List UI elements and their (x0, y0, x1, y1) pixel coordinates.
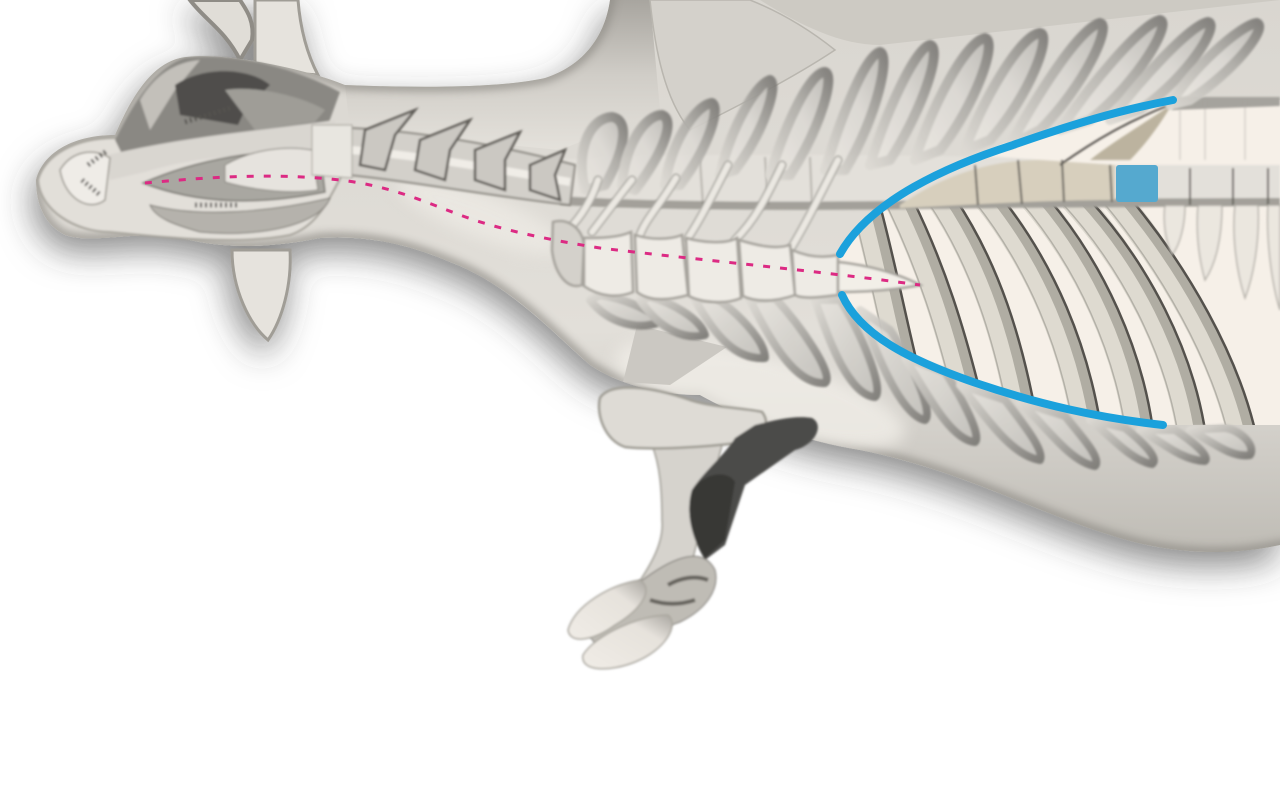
blue highlighted vertebra (1116, 165, 1158, 202)
blue rib outline lower (842, 295, 1163, 425)
foreleg (585, 388, 818, 650)
lower rib tips (590, 295, 1251, 466)
pink dashed path (145, 176, 920, 285)
body silhouette (36, 0, 1280, 552)
body tonal shading (36, 0, 1280, 552)
cervical vertebrae (310, 110, 575, 205)
skull (38, 57, 352, 240)
chest rib bands (851, 198, 1255, 434)
sternum (552, 221, 920, 302)
upper ribs (582, 20, 1259, 190)
blue rib outline upper (840, 100, 1173, 254)
hoof (568, 580, 672, 669)
vertebral column (560, 97, 1280, 211)
chest cavity (838, 100, 1280, 425)
upper rib stems (568, 160, 838, 250)
far-side ghost ribs (1164, 100, 1280, 310)
